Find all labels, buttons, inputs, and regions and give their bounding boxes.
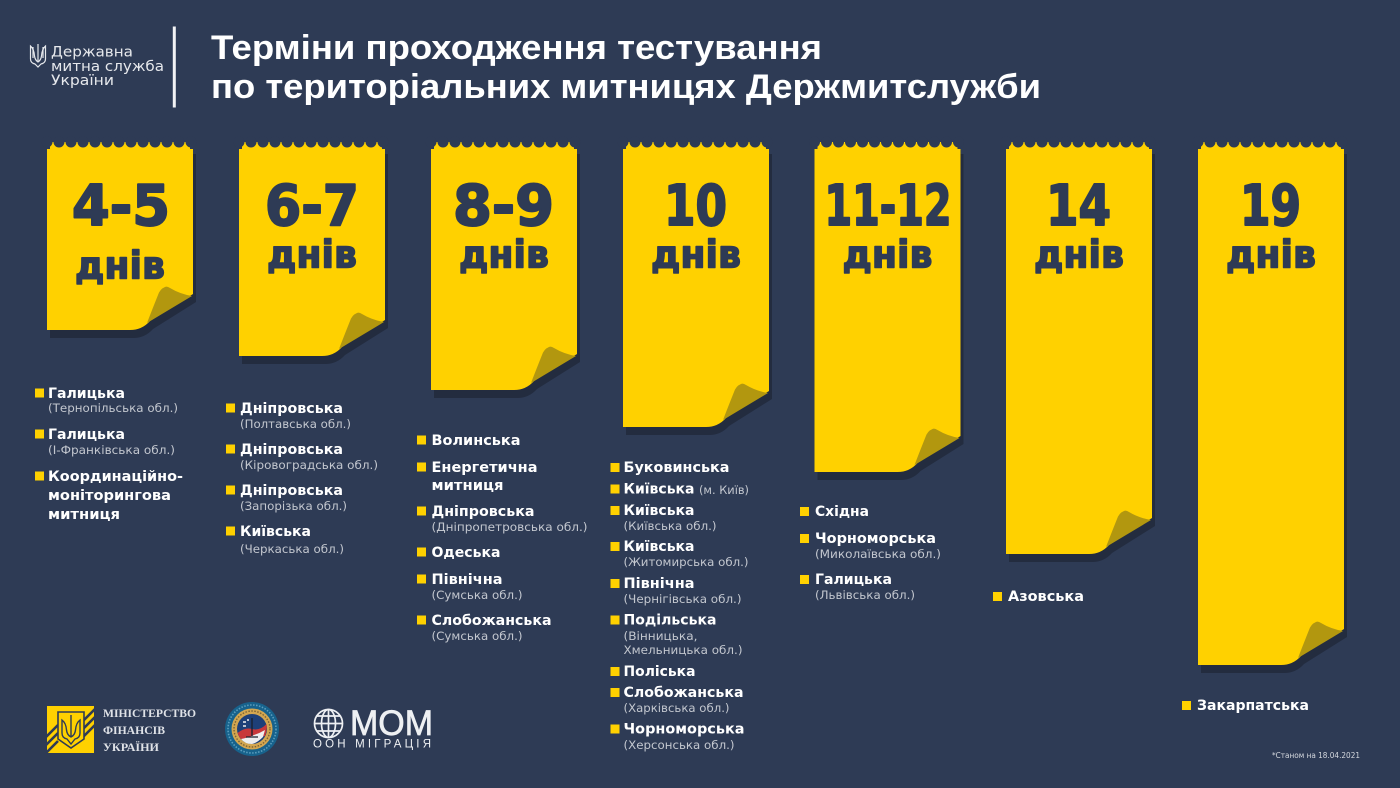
- header divider: [173, 26, 176, 108]
- card: 8-9 днів: днів: [459, 232, 549, 276]
- card: 6-7 днів: 6-7: [265, 174, 359, 239]
- list: 10 днів: Чорноморська: [624, 722, 744, 738]
- logo: Міністерство фінансів України: [46, 706, 196, 754]
- logo: Міністерство фінансів України: УКРАЇНИ: [103, 740, 160, 754]
- list: 10 днів: Київська: [624, 482, 694, 498]
- logo: МОМ ООН Міграція: ООН МІГРАЦІЯ: [313, 738, 431, 750]
- list: 4-5 днів: Галицька: [48, 386, 125, 402]
- list: 11-12 днів: [800, 504, 941, 602]
- card: 10 днів: 10: [664, 174, 727, 239]
- list: 4-5 днів: Координаційно-: [48, 469, 183, 485]
- list: 8-9 днів: Північна: [432, 572, 502, 588]
- title: Терміни проходження тестування: [211, 29, 822, 67]
- card: 8-9 днів: [431, 142, 580, 398]
- card: 14 днів: днів: [1034, 232, 1124, 276]
- list: 6-7 днів: Дніпровська: [240, 401, 343, 417]
- list: 10 днів: Київська: [624, 539, 694, 555]
- list: 10 днів: (Вінницька,: [624, 629, 698, 643]
- list: 8-9 днів: (Сумська обл.): [432, 629, 522, 643]
- list: 4-5 днів: (Тернопільська обл.): [48, 401, 178, 415]
- list: 6-7 днів: Київська: [240, 524, 311, 540]
- list: 8-9 днів: Волинська: [432, 433, 520, 449]
- card: 11-12 днів: 11-12: [824, 174, 952, 239]
- card: 14 днів: 14: [1046, 174, 1111, 239]
- list: 14 днів: Азовська: [1008, 589, 1084, 605]
- list: 10 днів: Хмельницька обл.): [624, 643, 742, 657]
- list: 4-5 днів: [35, 386, 183, 523]
- list: 11-12 днів: (Миколаївська обл.): [815, 547, 941, 561]
- list: 10 днів: [610, 460, 749, 752]
- list: 10 днів: Поліська: [624, 664, 696, 680]
- header logo: Державна митна служба України: митна служба: [51, 59, 164, 75]
- card: 14 днів: [1006, 142, 1155, 562]
- list: 4-5 днів: Галицька: [48, 427, 125, 443]
- title: [211, 29, 1041, 106]
- card: 8-9 днів: 8-9: [453, 174, 554, 239]
- list: 8-9 днів: Дніпровська: [432, 504, 534, 520]
- card: 19 днів: днів: [1226, 232, 1316, 276]
- list: 10 днів: (м. Київ): [699, 483, 749, 497]
- list: 10 днів: Київська: [624, 503, 694, 519]
- list: 10 днів: (Київська обл.): [624, 519, 716, 533]
- logo: МОМ ООН Міграція: МОМ: [350, 704, 433, 743]
- list: 6-7 днів: Дніпровська: [240, 483, 343, 499]
- card: 19 днів: 19: [1240, 174, 1301, 239]
- icon: globe: [314, 709, 343, 738]
- list: 10 днів: Подільська: [624, 612, 716, 628]
- logo: Міністерство фінансів України: ФІНАНСІВ: [103, 723, 165, 737]
- list: 10 днів: (Житомирська обл.): [624, 555, 748, 569]
- card: 11-12 днів: днів: [842, 232, 932, 276]
- card: 10 днів: [623, 142, 772, 435]
- list: 4-5 днів: моніторингова: [48, 488, 171, 504]
- list: 8-9 днів: [417, 433, 588, 643]
- logo: Міністерство фінансів України: МІНІСТЕРСТВО: [103, 706, 196, 720]
- list: 8-9 днів: митниця: [432, 478, 504, 494]
- list: 8-9 днів: (Сумська обл.): [432, 588, 522, 602]
- list: 11-12 днів: Східна: [815, 504, 869, 520]
- icon: trident: [30, 44, 46, 67]
- list: 10 днів: Слобожанська: [624, 685, 744, 701]
- list: 10 днів: Північна: [624, 576, 694, 592]
- header logo: Державна митна служба України: [30, 44, 164, 89]
- list: 10 днів: (Чернігівська обл.): [624, 592, 742, 606]
- card: 6-7 днів: [239, 142, 388, 364]
- list: 10 днів: (Харківська обл.): [624, 701, 730, 715]
- footnote: *Станом на 18.04.2021: [1272, 751, 1360, 760]
- header logo: Державна митна служба України: України: [51, 73, 114, 89]
- list: 4-5 днів: митниця: [48, 507, 120, 523]
- card: 4-5 днів: днів: [75, 244, 165, 288]
- list: 11-12 днів: Галицька: [815, 572, 892, 588]
- list: 6-7 днів: (Черкаська обл.): [240, 542, 344, 556]
- list: 11-12 днів: Чорноморська: [815, 531, 936, 547]
- list: 6-7 днів: Дніпровська: [240, 442, 343, 458]
- list: 10 днів: Буковинська: [624, 460, 730, 476]
- list: 6-7 днів: (Кіровоградська обл.): [240, 458, 378, 472]
- logo: МОМ ООН Міграція: [313, 704, 433, 750]
- list: 6-7 днів: [226, 401, 378, 556]
- card: 4-5 днів: [47, 142, 196, 338]
- title: по територіальних митницях Держмитслужби: [211, 68, 1041, 106]
- list: 8-9 днів: Слобожанська: [432, 613, 552, 629]
- logo: seal: [225, 702, 279, 756]
- list: 6-7 днів: (Запорізька обл.): [240, 499, 347, 513]
- card: 11-12 днів: [814, 142, 964, 480]
- card: 4-5 днів: 4-5: [72, 174, 170, 239]
- card: 6-7 днів: днів: [267, 232, 357, 276]
- header logo: Державна митна служба України: Державна: [51, 44, 133, 60]
- list: 8-9 днів: (Дніпропетровська обл.): [432, 520, 588, 534]
- card: 10 днів: днів: [651, 232, 741, 276]
- list: 10 днів: (Херсонська обл.): [624, 738, 734, 752]
- list: 11-12 днів: (Львівська обл.): [815, 588, 915, 602]
- list: 6-7 днів: (Полтавська обл.): [240, 417, 351, 431]
- list: 8-9 днів: Енергетична: [432, 460, 538, 476]
- list: 8-9 днів: Одеська: [432, 545, 500, 561]
- list: 19 днів: Закарпатська: [1197, 698, 1309, 714]
- card: 19 днів: [1198, 142, 1347, 673]
- list: 4-5 днів: (І-Франківська обл.): [48, 443, 175, 457]
